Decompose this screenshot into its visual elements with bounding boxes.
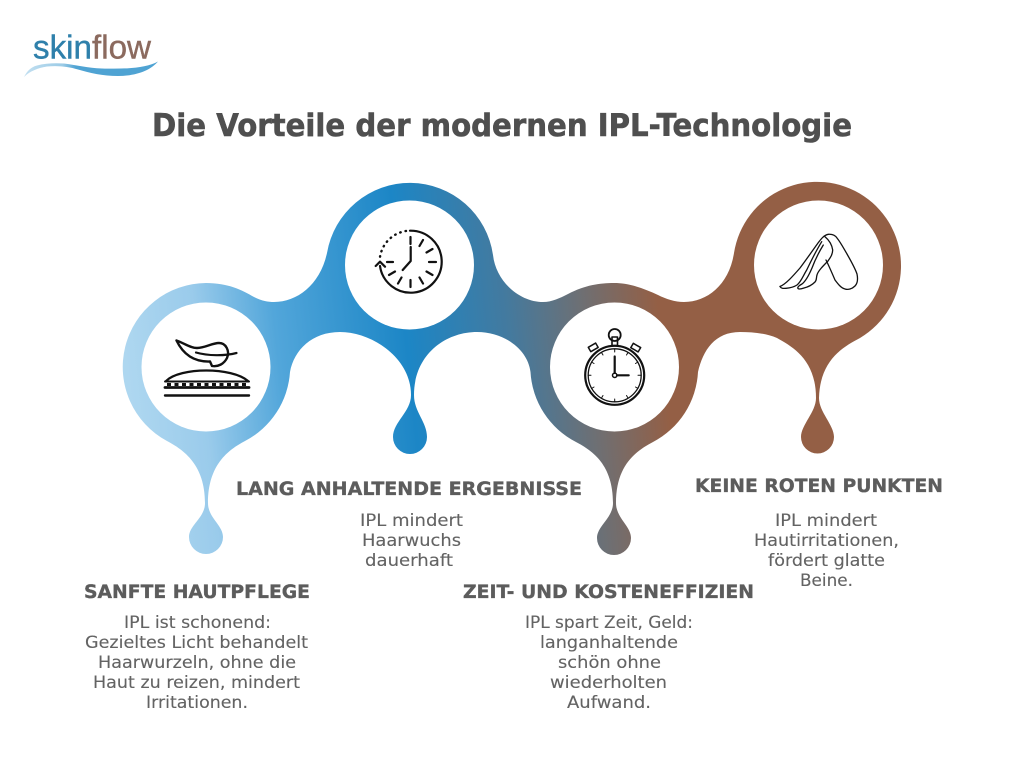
icon: stopwatch xyxy=(585,329,644,405)
icon: legs xyxy=(780,234,858,289)
icon: feather over skin layers xyxy=(165,340,249,396)
body text: Hautirritationen, xyxy=(754,531,899,550)
circle 1: gentle skin care xyxy=(142,302,270,432)
text block: Sanfte Hautpflege xyxy=(84,582,310,712)
circle 3: time and cost efficiency xyxy=(550,302,679,432)
body text: Haut zu reizen, mindert xyxy=(93,673,301,692)
body text: IPL ist schonend: xyxy=(124,613,271,632)
flowing chain shape xyxy=(123,182,901,555)
body text: Irritationen. xyxy=(146,693,248,712)
body text: Beine. xyxy=(800,571,853,590)
body text: Aufwand. xyxy=(567,693,651,712)
text block: Lang anhaltende Ergebnisse xyxy=(236,479,582,570)
body text: dauerhaft xyxy=(365,551,454,570)
title: Die Vorteile der modernen IPL-Technologie xyxy=(152,108,852,144)
body text: IPL mindert xyxy=(360,511,464,530)
heading: KEINE ROTEN PUNKTEN xyxy=(695,476,943,497)
text block: Zeit- und Kosteneffizien xyxy=(463,582,754,712)
heading: LANG ANHALTENDE ERGEBNISSE xyxy=(236,479,582,500)
body text xyxy=(85,613,309,712)
body text xyxy=(525,613,693,712)
body text: Gezieltes Licht behandelt xyxy=(85,633,309,652)
circle 4: no red spots xyxy=(754,200,883,330)
circle 2: long-lasting results xyxy=(345,200,474,330)
body text: schön ohne xyxy=(558,653,661,672)
body text: fördert glatte xyxy=(768,551,885,570)
body text: Haarwurzeln, ohne die xyxy=(98,653,296,672)
body text: IPL spart Zeit, Geld: xyxy=(525,613,693,632)
body text: IPL mindert xyxy=(775,511,878,530)
text block: Keine roten Punkten xyxy=(695,476,943,590)
body text: langanhaltende xyxy=(540,633,678,652)
body text: Haarwuchs xyxy=(362,531,461,550)
body text xyxy=(360,511,464,570)
logo: skinflow: skinflow xyxy=(33,28,151,66)
body text: wiederholten xyxy=(550,673,667,692)
heading: ZEIT- UND KOSTENEFFIZIEN xyxy=(463,582,754,603)
icon: clock with return arrow xyxy=(376,231,442,293)
body text xyxy=(754,511,899,590)
logo: skinflow xyxy=(24,28,158,77)
heading: SANFTE HAUTPFLEGE xyxy=(84,582,310,603)
